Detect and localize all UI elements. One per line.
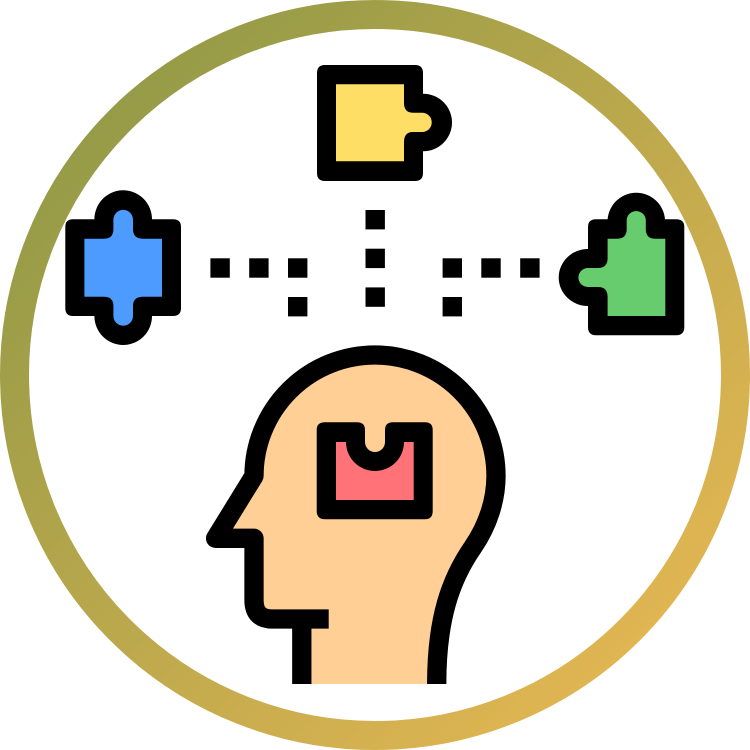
- icon: head profile with missing puzzle piece: [216, 355, 496, 684]
- dotted connector: right: [443, 258, 540, 316]
- icon: yellow puzzle piece: [317, 65, 452, 181]
- dotted connector: left: [210, 258, 307, 316]
- icon: green puzzle piece: [559, 193, 684, 335]
- icon: blue puzzle piece: [65, 190, 181, 345]
- dotted connector: centre: [366, 210, 385, 307]
